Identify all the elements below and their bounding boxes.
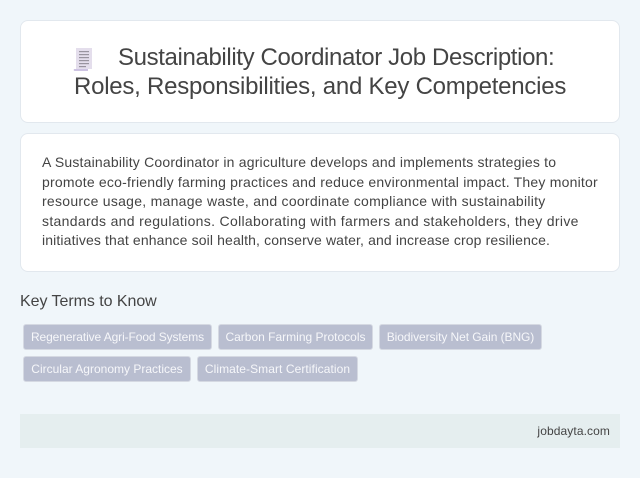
description text: standards and regulations. Collaborating with farmers and stakeholders, they drive [42, 213, 579, 229]
tag: Regenerative Agri-Food Systems [31, 330, 204, 344]
description text: resource usage, manage waste, and coordinate compliance with sustainability [42, 193, 546, 209]
tag: Carbon Farming Protocols [225, 330, 366, 344]
description text: A Sustainability Coordinator in agriculture develops and implements strategies to [42, 154, 556, 170]
panel: title card [20, 20, 620, 123]
heading: key terms: Key Terms to Know [20, 293, 157, 310]
tag: Circular Agronomy Practices [31, 362, 183, 376]
panel: description card [20, 133, 620, 272]
description text: promote eco-friendly farming practices and reduce environmental impact. They monitor [42, 174, 598, 190]
description text [42, 154, 598, 248]
tag [218, 324, 373, 350]
footer bar [20, 414, 620, 448]
tag [197, 356, 358, 382]
tag [23, 356, 191, 382]
heading line 2: Roles, Responsibilities, and Key Competencies [74, 73, 566, 100]
footer source text: jobdayta.com [537, 424, 610, 438]
tag: Climate-Smart Certification [205, 362, 350, 376]
icon: document scroll [74, 48, 92, 71]
tag: Biodiversity Net Gain (BNG) [387, 330, 534, 344]
tag [23, 324, 212, 350]
heading line 1: Sustainability Coordinator Job Description: [118, 44, 554, 71]
tag group: key terms [23, 324, 542, 382]
description text: initiatives that enhance soil health, conserve water, and increase crop resilience. [42, 232, 550, 248]
tag [379, 324, 542, 350]
